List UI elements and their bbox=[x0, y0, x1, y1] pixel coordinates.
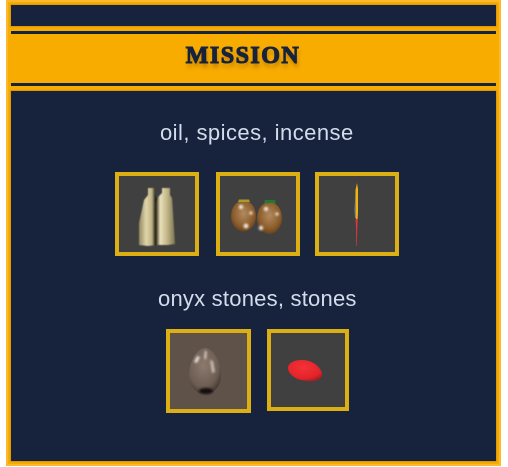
red pebble bbox=[288, 360, 322, 381]
bottle left bbox=[139, 188, 157, 246]
heading: MISSION: MISSION bbox=[186, 43, 300, 69]
item: oil bottles bbox=[115, 172, 199, 256]
panel: main navy content bbox=[11, 91, 496, 461]
item: onyx stone bbox=[166, 329, 251, 413]
egg base shadow bbox=[199, 388, 213, 394]
fruit right bbox=[257, 202, 282, 234]
header lower rule bbox=[11, 83, 496, 86]
header band: mission bbox=[11, 31, 496, 87]
egg highlights bbox=[194, 350, 215, 373]
panel: top navy strip bbox=[11, 5, 496, 26]
caption: onyx stones, stones: onyx stones, stones bbox=[158, 286, 357, 311]
bottle right bbox=[156, 188, 175, 245]
item: red stone bbox=[267, 329, 349, 411]
stick bbox=[356, 183, 358, 220]
caption: oil, spices, incense: oil, spices, incense bbox=[160, 120, 354, 145]
item: incense stick bbox=[315, 172, 399, 256]
fruit left bbox=[231, 200, 256, 232]
egg body bbox=[189, 348, 221, 394]
item: spice fruits bbox=[216, 172, 300, 256]
header upper rule bbox=[11, 31, 496, 34]
highlights bbox=[239, 205, 279, 230]
